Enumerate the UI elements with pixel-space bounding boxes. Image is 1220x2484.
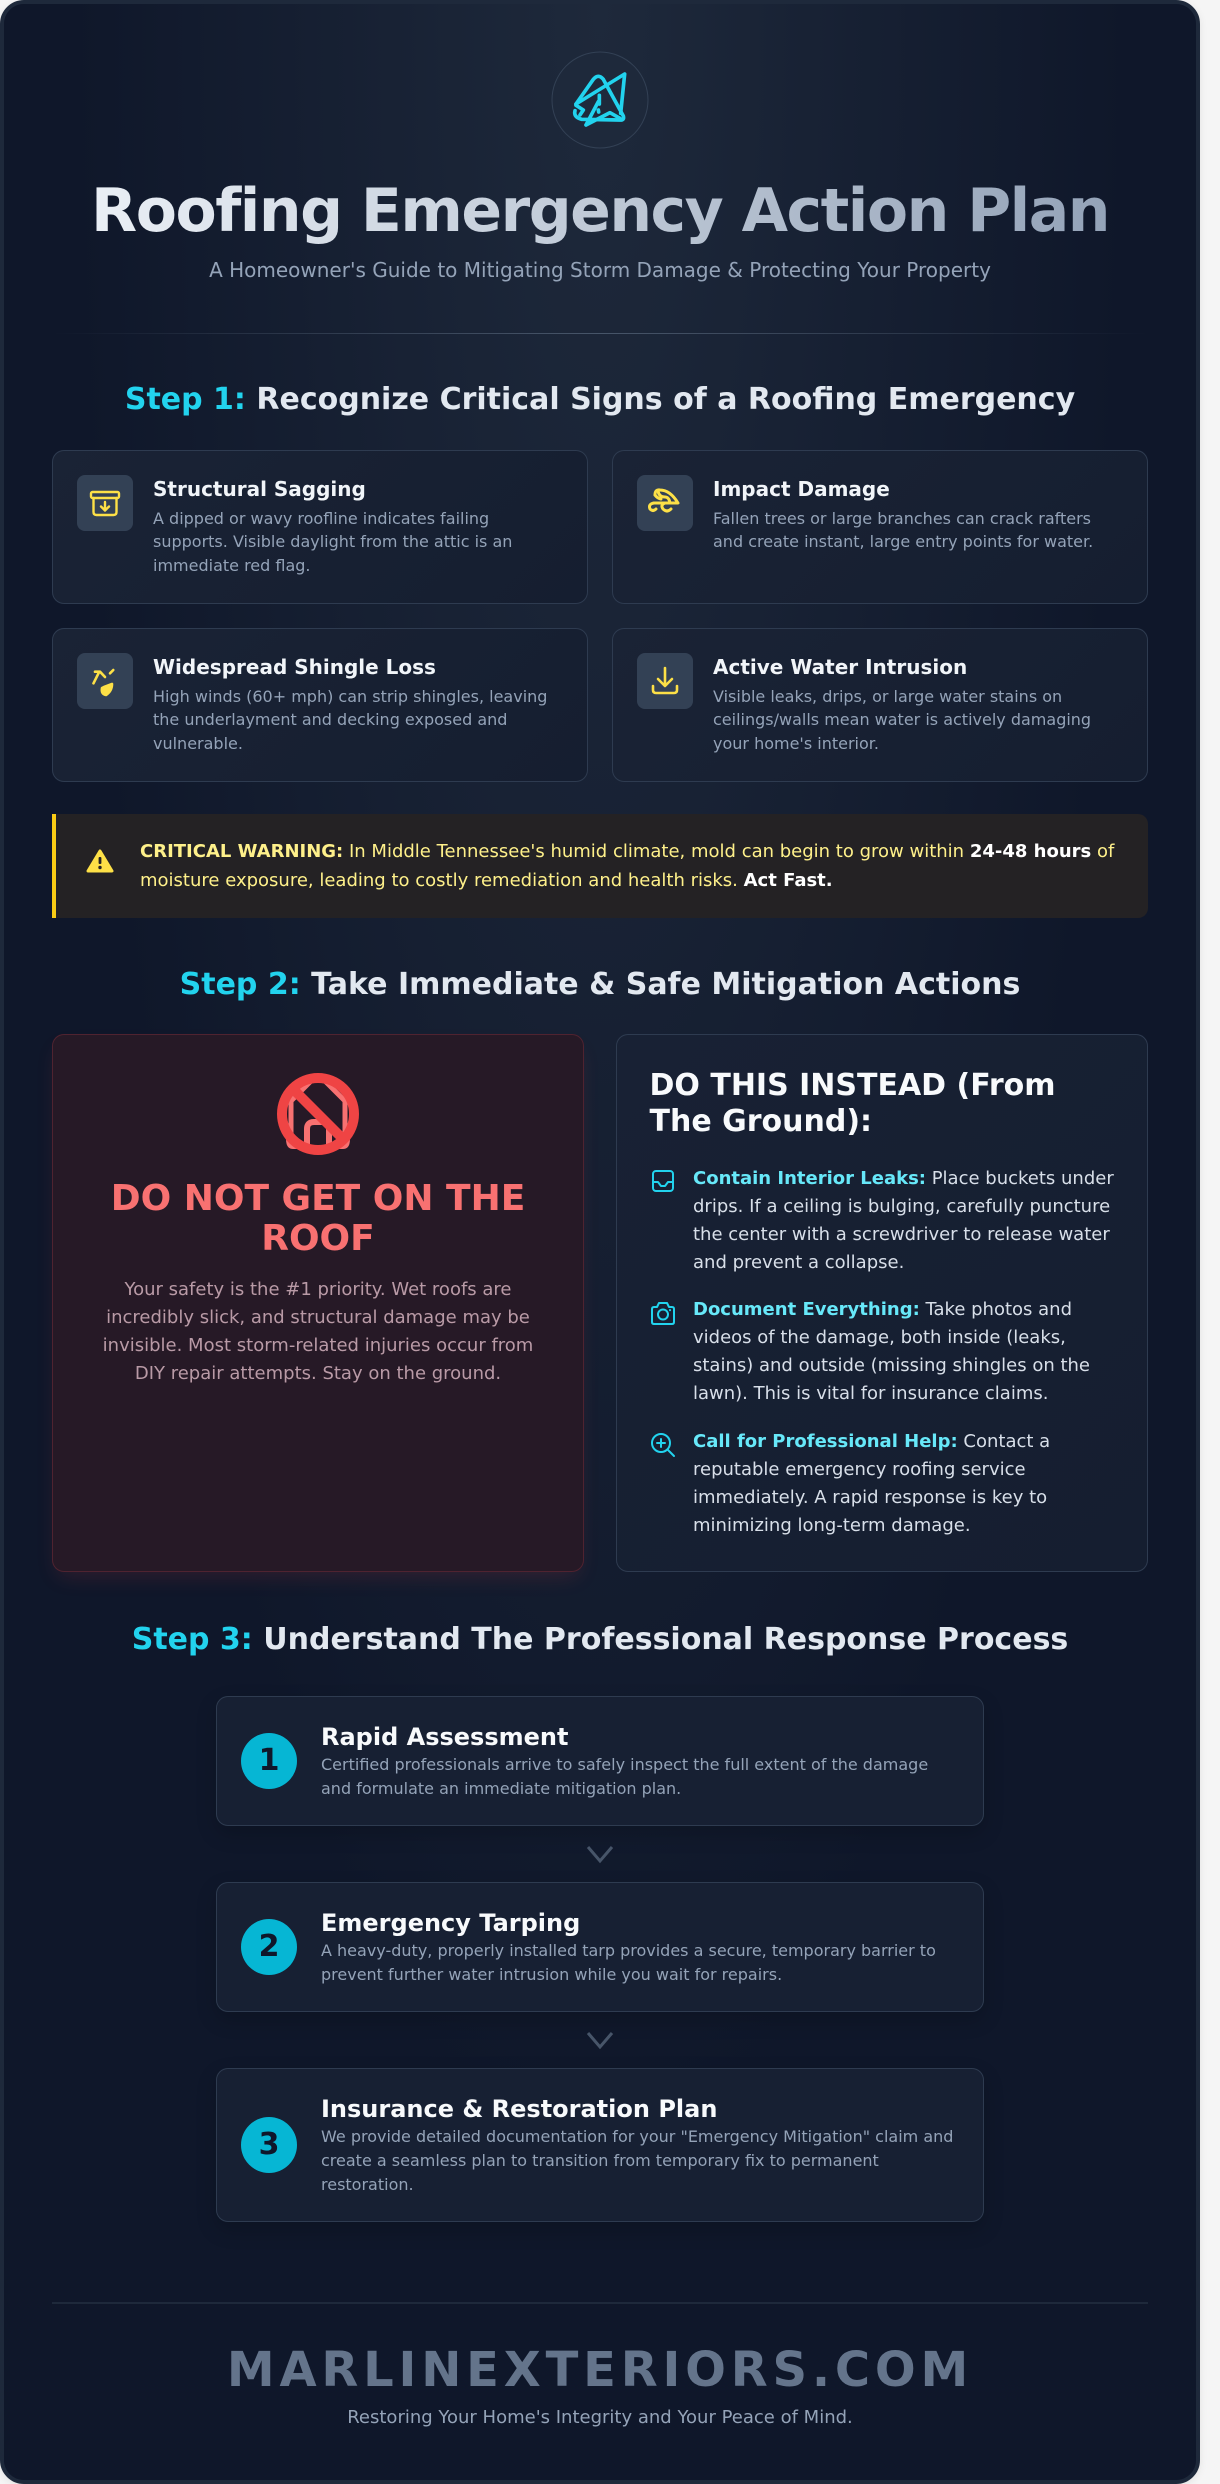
icon: storm damaged roof: [552, 52, 648, 148]
panel heading: DO THIS INSTEAD (From: [650, 1068, 1055, 1103]
icon: archive: [77, 475, 133, 531]
panel heading: The Ground):: [650, 1104, 872, 1139]
number badge: 3: [259, 2127, 279, 2162]
icon: camera: [651, 1302, 675, 1325]
step title: Insurance & Restoration Plan: [321, 2095, 717, 2123]
warning heading: DO NOT GET ON THE: [111, 1178, 525, 1219]
panel: water intrusion: [612, 628, 1148, 782]
icon: wind shingle: [77, 653, 133, 709]
card title: Active Water Intrusion: [713, 655, 967, 679]
card text: Visible leaks, drips, or large water stains on: [713, 686, 1062, 706]
panel: structural sagging: [52, 450, 588, 604]
step text: create a seamless plan to transition from temporary fix to permanent: [321, 2150, 879, 2170]
warning heading: [111, 1178, 525, 1259]
item: contain leaks: Contain Interior Leaks: Place buckets under: [693, 1168, 1114, 1188]
step text: restoration.: [321, 2174, 414, 2194]
card text: [713, 686, 1091, 753]
warning text: DIY repair attempts. Stay on the ground.: [135, 1362, 501, 1384]
card text: ceilings/walls mean water is actively damaging: [713, 710, 1091, 729]
callout: critical warning: [52, 814, 1148, 918]
warning text: CRITICAL WARNING: In Middle Tennessee's humid climate, mold can begin to grow within 24-48 hours of: [140, 841, 1114, 862]
item: call: Call for Professional Help: Contact a: [693, 1431, 1050, 1452]
item: document: [693, 1299, 1090, 1404]
item: contain leaks: and prevent a collapse.: [693, 1252, 904, 1272]
warning text: [140, 841, 1115, 891]
item: document: stains) and outside (missing shingles on the: [693, 1355, 1090, 1376]
heading: step 1: Step 1: Recognize Critical Signs of a Roofing Emergency: [125, 382, 1075, 417]
card text: vulnerable.: [153, 734, 243, 753]
icon: inbox: [652, 1170, 674, 1192]
card text: your home's interior.: [713, 734, 879, 753]
icon: impact: [637, 475, 693, 531]
subtitle: A Homeowner's Guide to Mitigating Storm Damage & Protecting Your Property: [209, 258, 991, 282]
panel: shingle loss: [52, 628, 588, 782]
number badge: [241, 1733, 297, 1789]
footer tagline: Restoring Your Home's Integrity and Your Peace of Mind.: [347, 2407, 853, 2428]
warning text: [103, 1278, 533, 1384]
icon: magnifier: [651, 1433, 675, 1457]
item: call: minimizing long-term damage.: [693, 1515, 971, 1536]
panel heading: [650, 1068, 1055, 1139]
panel: do this instead: [616, 1034, 1148, 1572]
step text: Certified professionals arrive to safely inspect the full extent of the damage: [321, 1754, 928, 1774]
number badge: [241, 2117, 297, 2173]
process step 1: [216, 1696, 984, 1826]
card text: the underlayment and decking exposed and: [153, 710, 507, 729]
item: call: [693, 1431, 1050, 1536]
footer brand: MARLINEXTERIORS.COM: [227, 2342, 973, 2398]
icon: no roof: [277, 1073, 359, 1155]
number badge: [241, 1919, 297, 1975]
item: contain leaks: the center with a screwdriver to release water: [693, 1224, 1110, 1244]
card text: [713, 508, 1093, 551]
arrow: chevron down: [587, 2032, 613, 2049]
process step 2: [216, 1882, 984, 2012]
card text: and create instant, large entry points for water.: [713, 532, 1093, 551]
warning text: moisture exposure, leading to costly remediation and health risks. Act Fast.: [140, 870, 833, 891]
item: contain leaks: drips. If a ceiling is bulging, carefully puncture: [693, 1196, 1110, 1216]
step text: [321, 1754, 928, 1798]
card text: supports. Visible daylight from the attic is an: [153, 532, 512, 551]
step text: We provide detailed documentation for your "Emergency Mitigation" claim and: [321, 2126, 953, 2146]
process step 3: [216, 2068, 984, 2222]
step text: A heavy-duty, properly installed tarp provides a secure, temporary barrier to: [321, 1940, 936, 1960]
card title: Widespread Shingle Loss: [153, 655, 436, 679]
number badge: 1: [259, 1743, 279, 1778]
step title: Emergency Tarping: [321, 1909, 580, 1937]
step title: Rapid Assessment: [321, 1723, 568, 1751]
title: Roofing Emergency Action Plan: [91, 176, 1109, 246]
heading: step 2: Step 2: Take Immediate & Safe Mitigation Actions: [180, 966, 1020, 1002]
heading: step 3: Step 3: Understand The Professional Response Process: [132, 1622, 1068, 1656]
item: document: lawn). This is vital for insurance claims.: [693, 1383, 1048, 1404]
step text: prevent further water intrusion while you wait for repairs.: [321, 1964, 782, 1984]
item: document: Document Everything: Take photos and: [693, 1299, 1072, 1320]
card text: A dipped or wavy roofline indicates failing: [153, 508, 489, 528]
warning text: invisible. Most storm-related injuries occur from: [103, 1334, 533, 1356]
card title: Impact Damage: [713, 477, 890, 501]
card text: Fallen trees or large branches can crack rafters: [713, 508, 1091, 528]
arrow: chevron down: [587, 1846, 613, 1863]
item: document: videos of the damage, both inside (leaks,: [693, 1327, 1066, 1348]
warning heading: ROOF: [261, 1218, 375, 1259]
item: contain leaks: [693, 1168, 1114, 1272]
card text: [153, 686, 547, 753]
number badge: 2: [259, 1929, 279, 1964]
card text: High winds (60+ mph) can strip shingles, leaving: [153, 686, 547, 706]
step text: [321, 1940, 936, 1984]
item: call: reputable emergency roofing service: [693, 1459, 1026, 1480]
card text: [153, 508, 512, 575]
panel: do not get on the roof: [52, 1034, 584, 1572]
warning text: incredibly slick, and structural damage may be: [106, 1306, 530, 1328]
card text: immediate red flag.: [153, 556, 311, 575]
warning text: Your safety is the #1 priority. Wet roofs are: [124, 1278, 512, 1300]
item: call: immediately. A rapid response is key to: [693, 1487, 1047, 1508]
step text: [321, 2126, 953, 2194]
icon: download tray: [637, 653, 693, 709]
panel: impact damage: [612, 450, 1148, 604]
step text: and formulate an immediate mitigation plan.: [321, 1778, 681, 1798]
icon: warning triangle: [86, 849, 114, 872]
card title: Structural Sagging: [153, 477, 366, 501]
